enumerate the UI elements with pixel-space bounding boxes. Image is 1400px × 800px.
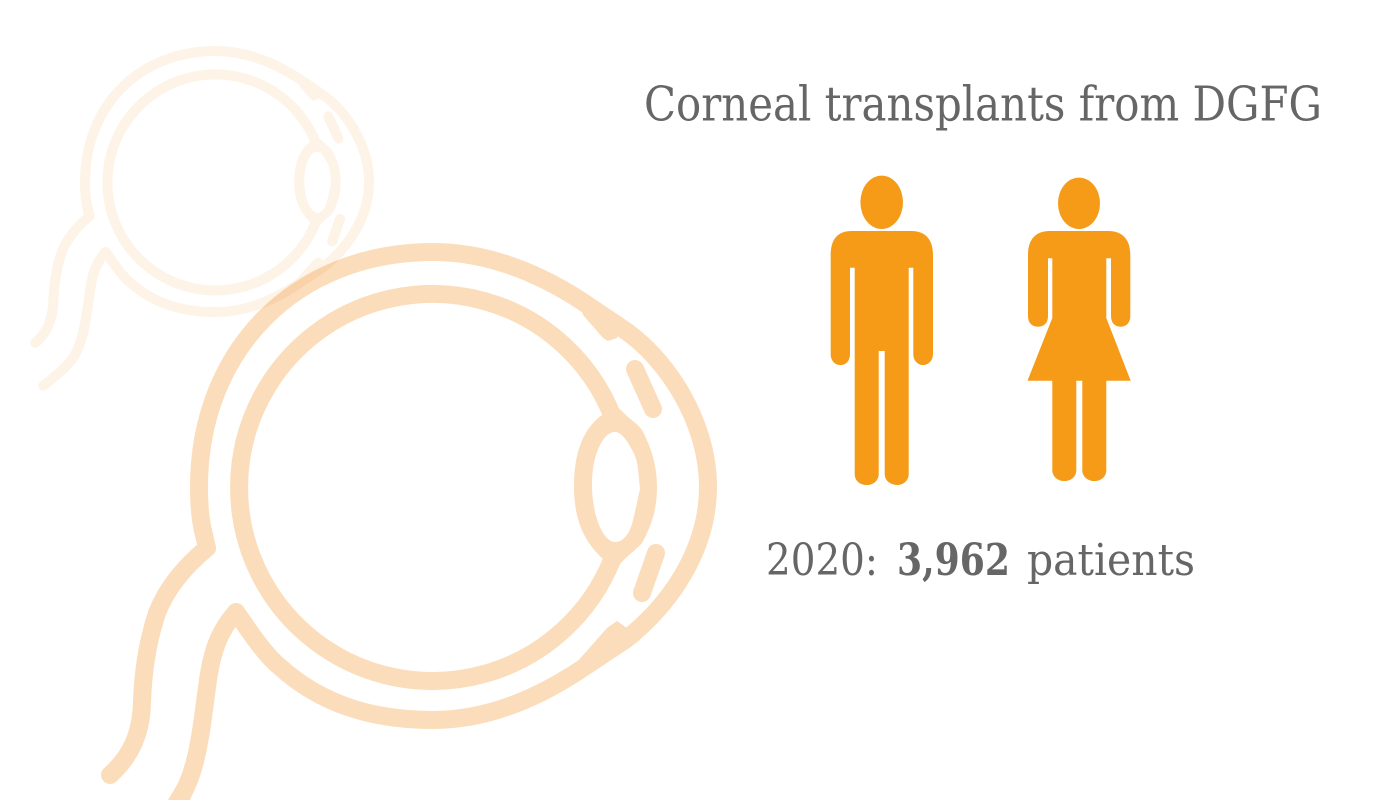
icon: small faded eye	[35, 51, 369, 386]
ciliary bars	[635, 369, 656, 593]
icon: man	[831, 176, 933, 485]
patient count: patients	[1027, 535, 1195, 586]
icon: large eye	[110, 252, 708, 800]
nerve end at page edge	[168, 785, 193, 800]
lens	[574, 405, 657, 570]
sclera and optic nerve outline	[110, 252, 708, 789]
upper sclera notch	[577, 290, 623, 341]
patient count: 2020:	[766, 535, 878, 586]
patient count	[766, 535, 1195, 586]
lower sclera notch	[577, 621, 640, 677]
title: Corneal transplants from DGFG	[644, 78, 1322, 133]
patient count: 3,962	[897, 535, 1010, 586]
inner retina circle	[239, 294, 612, 681]
icon: woman	[1028, 178, 1131, 481]
